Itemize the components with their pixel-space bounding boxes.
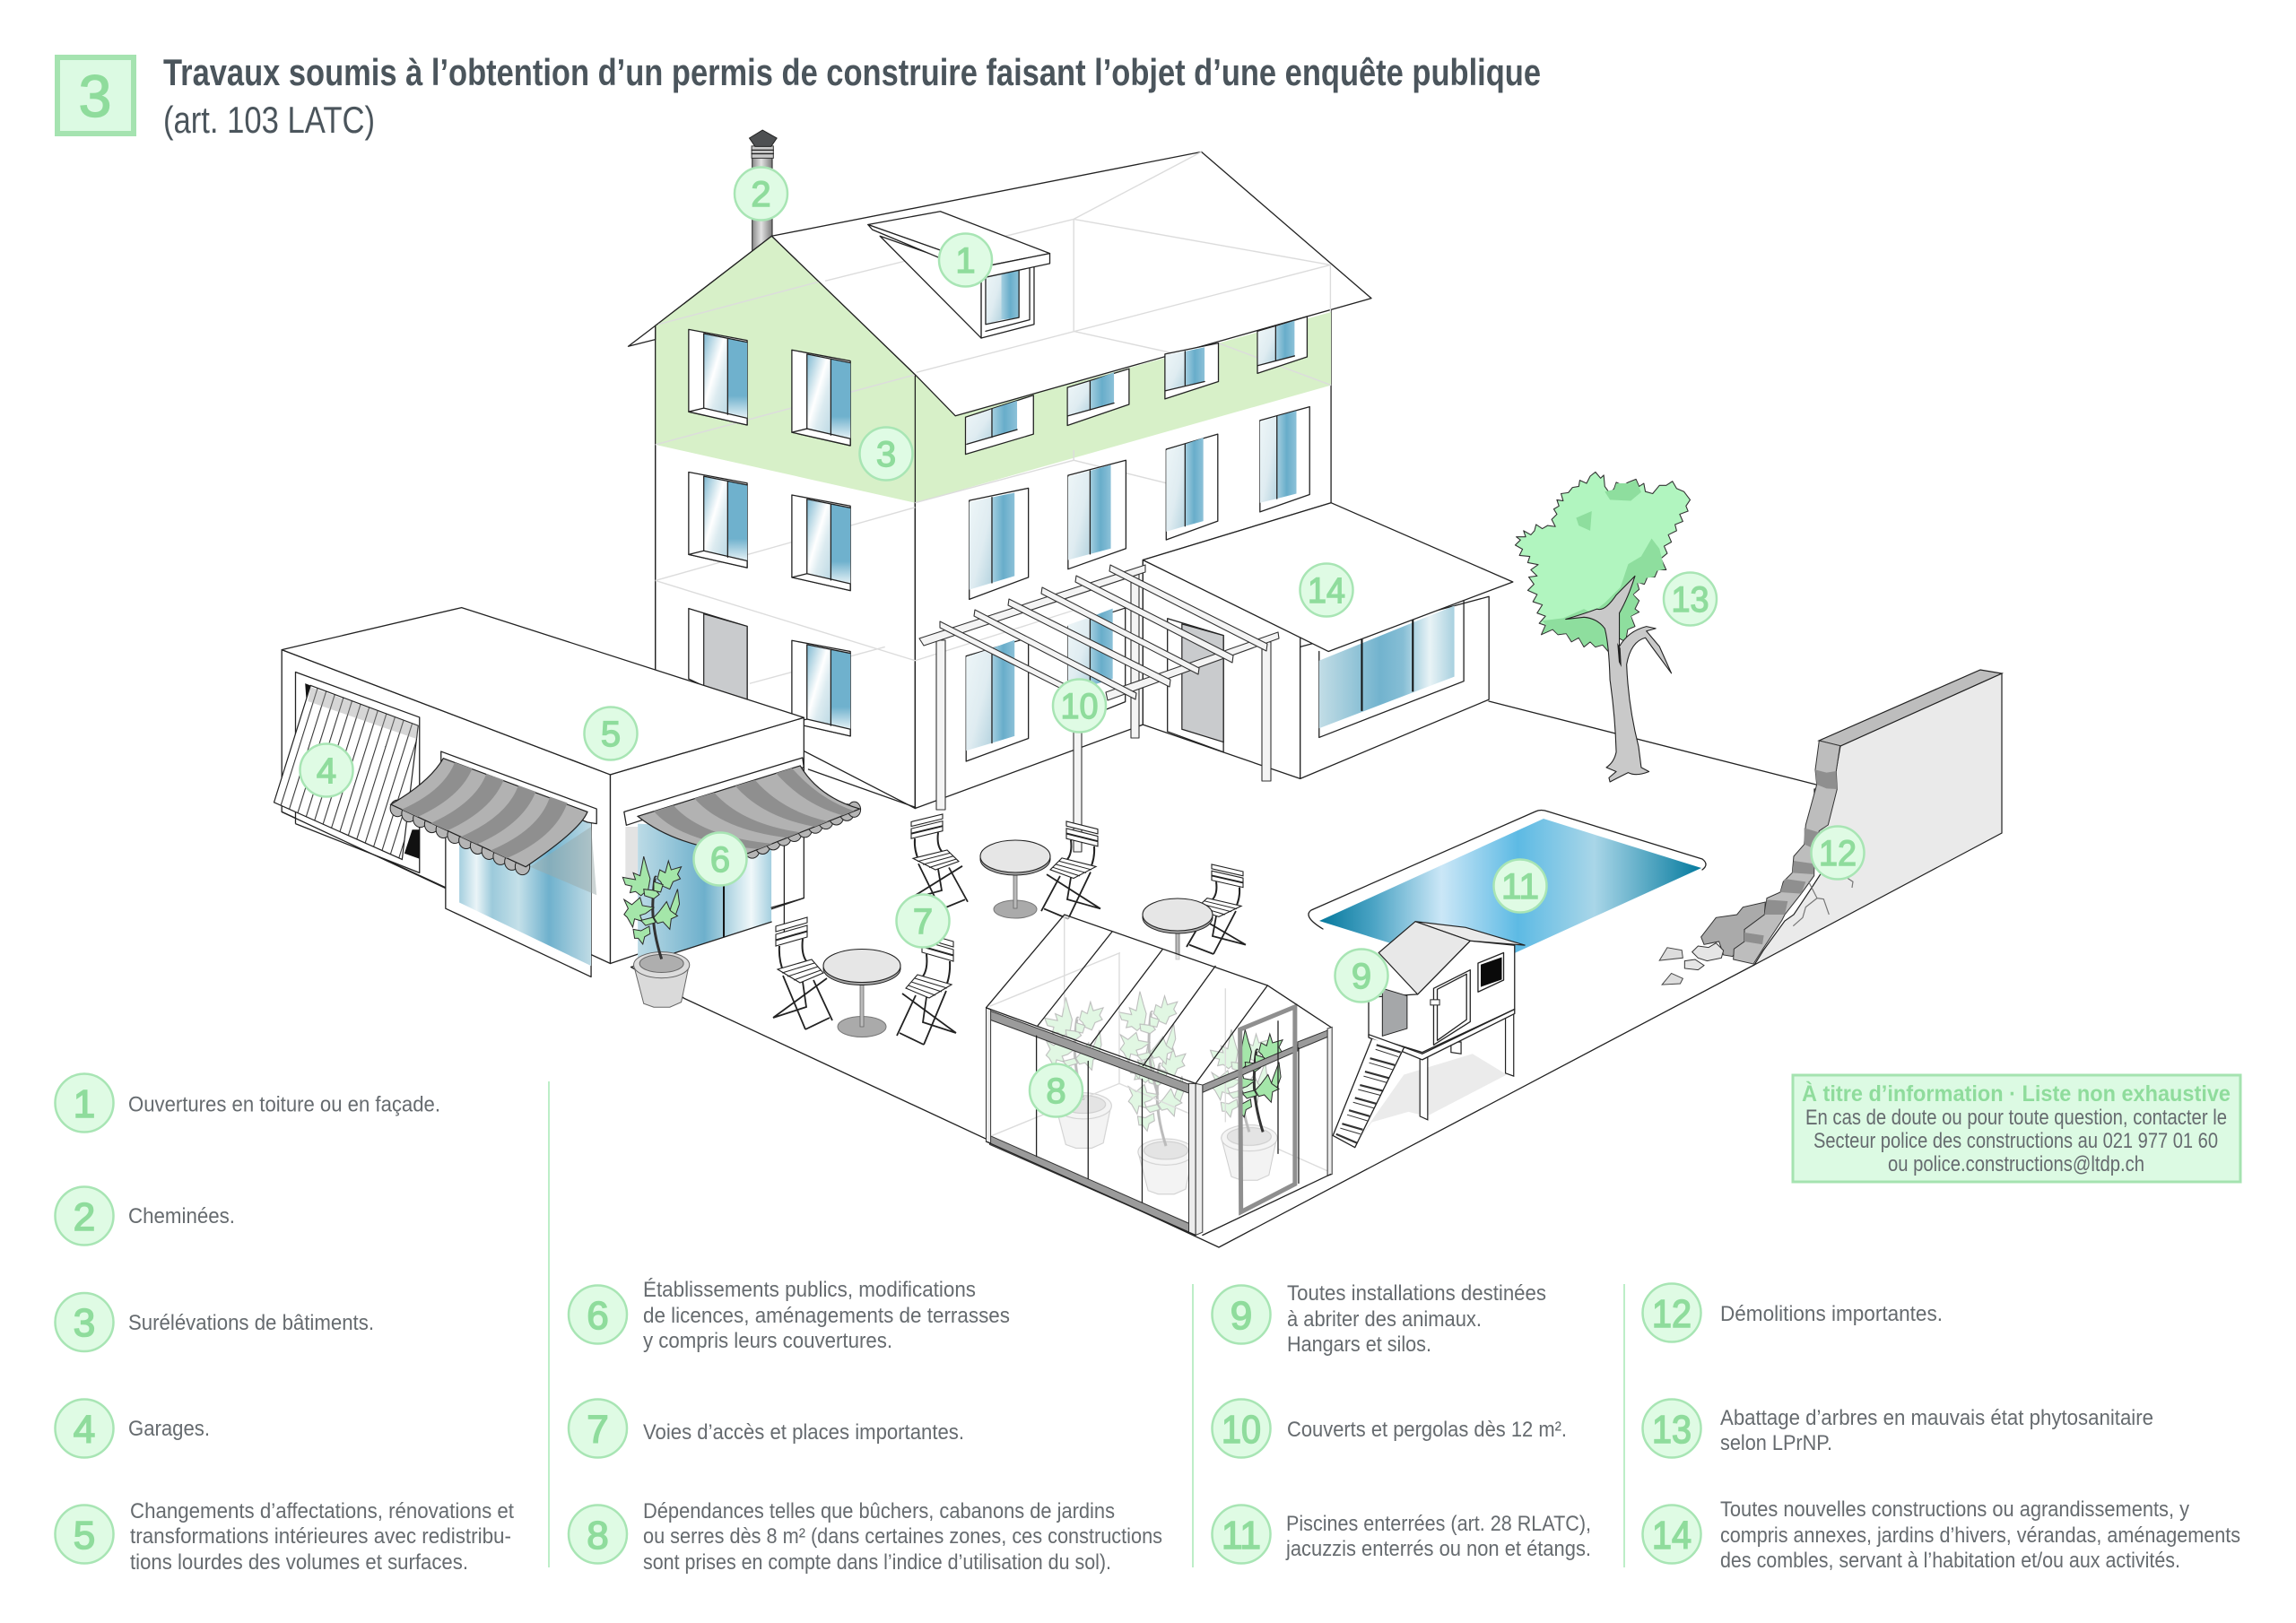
marker 9 (1335, 949, 1388, 1002)
legend item 8: ou serres dès 8 m² (dans certaines zones, ces constructions (643, 1524, 1162, 1549)
left facade with gable (656, 236, 915, 809)
door (1431, 970, 1470, 1045)
legend item 12 (1643, 1284, 1943, 1341)
legend item 5: transformations intérieures avec redistribu- (130, 1524, 511, 1549)
legend item 10: Couverts et pergolas dès 12 m². (1287, 1418, 1567, 1442)
marker 1 (939, 233, 992, 287)
awning left (390, 751, 596, 875)
legend item 14: Toutes nouvelles constructions ou agrandissements, y (1720, 1497, 2189, 1522)
legend item 8: 8 (587, 1514, 609, 1558)
legend item 6 (569, 1278, 1010, 1353)
marker 9: 9 (1352, 957, 1371, 996)
left facade windows (689, 329, 850, 736)
legend item 13: Abattage d’arbres en mauvais état phytosanitaire (1720, 1406, 2153, 1430)
legend item 3: Surélévations de bâtiments. (128, 1311, 374, 1335)
legend item 9: Hangars et silos. (1287, 1332, 1431, 1357)
legend item 11 (1213, 1505, 1591, 1564)
wall face (1754, 673, 2002, 965)
garage door (274, 673, 457, 894)
badge: section number 3 (57, 57, 134, 134)
dormer (868, 212, 1050, 338)
legend item 4: Garages. (128, 1417, 210, 1441)
legend item 11: Piscines enterrées (art. 28 RLATC), (1286, 1512, 1591, 1536)
legend item 6: Établissements publics, modifications (643, 1278, 976, 1302)
legend item 1: Ouvertures en toiture ou en façade. (128, 1092, 440, 1117)
interior plants (1045, 992, 1277, 1194)
shop window right (625, 824, 804, 998)
legend item 4 (56, 1399, 210, 1458)
table middle (980, 840, 1050, 918)
marker 13 (1664, 572, 1717, 626)
legend item 13: selon LPrNP. (1720, 1431, 1832, 1455)
legend item 10 (1213, 1399, 1567, 1458)
glass floor (986, 915, 1331, 1236)
extension walls (1143, 560, 1489, 778)
marker 8: 8 (1046, 1072, 1066, 1111)
stilts (1420, 1013, 1514, 1120)
canopy (1515, 472, 1690, 651)
legend item 11: jacuzzis enterrés ou non et étangs. (1285, 1537, 1591, 1561)
tree (1515, 472, 1690, 782)
window (1478, 952, 1504, 992)
eave overhang (629, 325, 656, 346)
marker 14: 14 (1308, 571, 1345, 611)
pergola (919, 565, 1279, 852)
marker 7 (897, 895, 949, 947)
swimming pool (1309, 811, 1706, 970)
roof and wall lines (986, 915, 1331, 1236)
legend item 9: 9 (1231, 1294, 1252, 1338)
legend item 12: 12 (1652, 1292, 1692, 1336)
marker 14 (1300, 563, 1352, 617)
front post (1074, 704, 1082, 852)
legend item 7: Voies d’accès et places importantes. (643, 1420, 964, 1445)
legend item 9 (1213, 1281, 1546, 1357)
legend item 5: tions lourdes des volumes et surfaces. (130, 1550, 468, 1575)
legend item 6: de licences, aménagements de terrasses (643, 1304, 1010, 1328)
cross beams (919, 565, 1279, 700)
legend item 14: des combles, servant à l’habitation et/ou aux activités. (1720, 1549, 2180, 1573)
legend item 3: 3 (74, 1301, 95, 1345)
marker 2 (735, 167, 787, 221)
legend item 14 (1643, 1497, 2240, 1573)
chicken coop (1333, 922, 1526, 1148)
legend item 2: 2 (74, 1195, 95, 1239)
title: Travaux soumis à l’obtention d’un permis de construire faisant l’objet d’une enquête publique (163, 51, 1541, 93)
table front (823, 949, 900, 1037)
marker 3: 3 (876, 435, 896, 474)
greenhouse (986, 915, 1332, 1236)
rafters (940, 565, 1267, 708)
potted plant (622, 856, 690, 1007)
badge: section number 3: 3 (79, 63, 111, 129)
marker 6 (694, 832, 746, 886)
demolished wall (1659, 670, 2002, 985)
legend item 8 (569, 1499, 1162, 1575)
rubble heap (1701, 902, 1765, 957)
legend item 9: à abriter des animaux. (1287, 1307, 1482, 1332)
legend item 7: 7 (587, 1408, 609, 1452)
left wall (282, 650, 611, 963)
marker 6: 6 (710, 840, 730, 880)
marker 11: 11 (1501, 867, 1539, 907)
platform (1369, 1009, 1515, 1060)
main building (629, 152, 1513, 809)
legend item 9: Toutes installations destinées (1287, 1281, 1546, 1306)
roof (771, 152, 1371, 416)
marker 1: 1 (955, 241, 976, 281)
legend item 2 (56, 1187, 235, 1245)
icon: chimney (750, 130, 777, 252)
awning right (624, 758, 861, 858)
loose stones (1659, 948, 1683, 985)
legend item 3 (56, 1293, 374, 1351)
legend item 5 (56, 1499, 514, 1575)
attic windows right facade (966, 317, 1307, 455)
ladder (1333, 1039, 1404, 1148)
posts (986, 1008, 1332, 1236)
callout: information box: En cas de doute ou pour toute question, contacter le (1805, 1106, 2227, 1130)
legend item 8: Dépendances telles que bûchers, cabanons de jardins (643, 1499, 1115, 1523)
frames (990, 1011, 1328, 1232)
callout: information box: À titre d’information · Liste non exhaustive (1802, 1081, 2231, 1107)
extension roof (1143, 503, 1513, 652)
broken edge and rubble (1684, 741, 1853, 970)
roof (282, 608, 804, 775)
marker 5 (585, 707, 637, 760)
legend item 10: 10 (1222, 1408, 1261, 1452)
marker 10: 10 (1060, 687, 1098, 726)
title (163, 51, 1541, 141)
roof (1378, 922, 1526, 994)
legend item 5: Changements d’affectations, rénovations et (130, 1499, 514, 1523)
wall top (1819, 670, 2002, 746)
legend item 6: y compris leurs couvertures. (643, 1329, 892, 1353)
marker 12: 12 (1819, 834, 1857, 873)
callout: information box: ou police.constructions@ltdp.ch (1888, 1152, 2144, 1176)
raised storey highlighted in green (656, 236, 1331, 809)
title: (art. 103 LATC) (163, 99, 375, 141)
canopy shading (1543, 481, 1665, 650)
callout: information box (1793, 1075, 2240, 1182)
legend item 7 (569, 1399, 964, 1458)
trunk (1566, 576, 1672, 782)
marker 8 (1030, 1063, 1083, 1117)
callout: information box: Secteur police des constructions au 021 977 01 60 (1813, 1129, 2218, 1153)
legend item 4: 4 (74, 1408, 95, 1452)
legend item 1 (56, 1074, 440, 1132)
marker 2: 2 (751, 175, 771, 214)
legend item 5: 5 (74, 1514, 95, 1558)
broken face (1734, 741, 1840, 964)
annex garage building (274, 608, 916, 1007)
plant seen through door (1242, 1029, 1283, 1133)
shadow (1356, 1054, 1507, 1143)
legend item 8: sont prises en compte dans l’indice d’utilisation du sol). (643, 1550, 1111, 1575)
legend item 11: 11 (1222, 1514, 1261, 1558)
legend item 6: 6 (587, 1294, 609, 1338)
marker 7: 7 (913, 902, 933, 942)
marker 4: 4 (317, 751, 336, 791)
legend item 13: 13 (1652, 1408, 1692, 1452)
marker 10 (1053, 680, 1106, 732)
legend item 14: 14 (1652, 1514, 1692, 1558)
right facade (915, 272, 1331, 809)
legend item 1: 1 (74, 1082, 95, 1126)
door (1240, 1007, 1295, 1212)
terrace furniture (773, 814, 1246, 1045)
chairs (773, 814, 1246, 1045)
legend item 14: compris annexes, jardins d’hivers, vérandas, aménagements (1720, 1523, 2240, 1548)
shop window left (446, 800, 596, 976)
legend item 13 (1643, 1399, 2153, 1458)
column dividers (549, 1081, 1624, 1567)
middle and lower windows right facade (966, 407, 1309, 761)
legend item 12: Démolitions importantes. (1720, 1302, 1943, 1326)
right wall (611, 717, 804, 963)
ground outline lines (683, 701, 1816, 1247)
body (1369, 941, 1515, 1053)
table back (1143, 898, 1213, 959)
marker 5: 5 (601, 715, 621, 754)
marker 13: 13 (1672, 580, 1709, 620)
posts (936, 574, 1271, 810)
marker 4 (300, 744, 353, 796)
marker 11 (1494, 859, 1546, 913)
legend item 2: Cheminées. (128, 1204, 235, 1228)
marker 3 (859, 427, 913, 481)
marker 12 (1812, 827, 1864, 879)
